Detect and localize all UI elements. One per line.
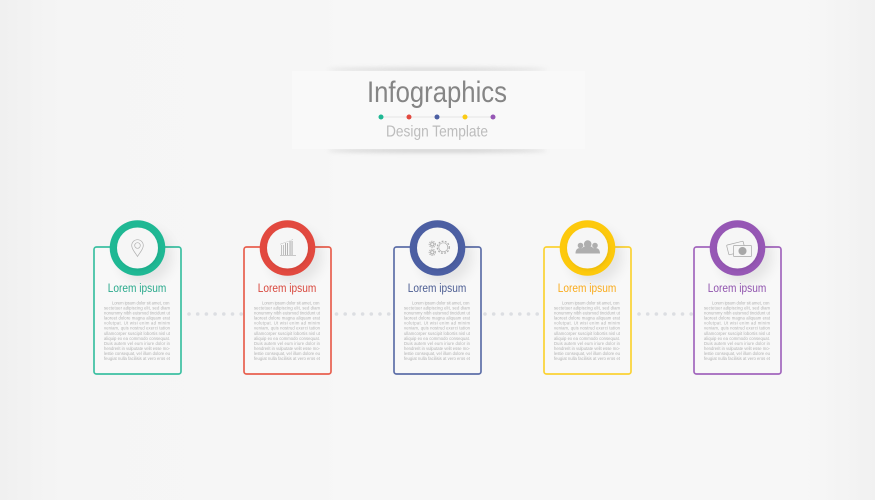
heading: Lorem ipsum: [708, 283, 766, 295]
text block: aliquip ex ea commodo consequat.: [254, 336, 320, 341]
text block: nonummy nibh euismod tincidunt ut: [404, 311, 471, 316]
text block: veniam, quis nostrud exerci tation: [554, 326, 621, 331]
colour dot row: [378, 114, 496, 120]
heading: Lorem ipsum: [108, 283, 166, 295]
text block: hendrerit in vulputate velit esse mo-: [704, 346, 771, 351]
text block: ullamcorper suscipit lobortis nisl ut: [704, 331, 771, 336]
text block: veniam, quis nostrud exerci tation: [104, 326, 171, 331]
text block: volutpat. Ut wisi enim ad minim: [254, 321, 320, 326]
text block: lestie consequat, vel illum dolore eu: [104, 351, 171, 356]
text block: Lorem ipsum dolor sit amet, con: [112, 300, 170, 306]
text block: lestie consequat, vel illum dolore eu: [704, 351, 771, 356]
text block: nonummy nibh euismod tincidunt ut: [104, 311, 171, 316]
text block: veniam, quis nostrud exerci tation: [404, 326, 471, 331]
text block: ullamcorper suscipit lobortis nisl ut: [254, 331, 321, 336]
text block: ullamcorper suscipit lobortis nisl ut: [104, 331, 171, 336]
text block: nonummy nibh euismod tincidunt ut: [554, 311, 621, 316]
text block: volutpat. Ut wisi enim ad minim: [104, 321, 170, 326]
text block: aliquip ex ea commodo consequat.: [704, 336, 770, 341]
text block: Duis autem vel eum iriure dolor in: [404, 341, 471, 346]
text block: laoreet dolore magna aliquam erat: [254, 316, 321, 321]
text block: volutpat. Ut wisi enim ad minim: [704, 321, 770, 326]
panel: card 3 (blue): [394, 220, 481, 374]
text block: feugiat nulla facilisis at vero eros et: [104, 356, 171, 361]
text block: aliquip ex ea commodo consequat.: [104, 336, 170, 341]
text block: hendrerit in vulputate velit esse mo-: [404, 346, 471, 351]
text block: Lorem ipsum dolor sit amet, con: [712, 300, 770, 306]
panel: title banner: [292, 68, 585, 152]
heading: Lorem ipsum: [558, 283, 616, 295]
text block: sectetuer adipiscing elit, sed diam: [404, 306, 470, 310]
text block: hendrerit in vulputate velit esse mo-: [104, 346, 171, 351]
text block: aliquip ex ea commodo consequat.: [554, 336, 620, 341]
text block: hendrerit in vulputate velit esse mo-: [554, 346, 621, 351]
text block: sectetuer adipiscing elit, sed diam: [704, 306, 770, 310]
text block: veniam, quis nostrud exerci tation: [704, 326, 771, 331]
icon: bar chart: [280, 239, 296, 256]
text block: laoreet dolore magna aliquam erat: [104, 316, 171, 321]
text block: Duis autem vel eum iriure dolor in: [704, 341, 771, 346]
text block: [104, 300, 171, 361]
text block: feugiat nulla facilisis at vero eros et: [704, 356, 771, 361]
text block: [254, 300, 321, 361]
title: Infographics: [367, 76, 507, 109]
text block: [554, 300, 621, 361]
text block: feugiat nulla facilisis at vero eros et: [254, 356, 321, 361]
panel: card 1 (green): [94, 220, 181, 374]
text block: ullamcorper suscipit lobortis nisl ut: [404, 331, 471, 336]
panel: card 5 (purple): [694, 220, 781, 374]
heading: Lorem ipsum: [408, 283, 466, 295]
text block: Lorem ipsum dolor sit amet, con: [412, 300, 470, 306]
text block: sectetuer adipiscing elit, sed diam: [554, 306, 620, 310]
panel: card 2 (red): [244, 220, 331, 374]
text block: feugiat nulla facilisis at vero eros et: [554, 356, 621, 361]
text block: [404, 300, 471, 361]
dotted connectors: [187, 312, 693, 316]
text block: Duis autem vel eum iriure dolor in: [554, 341, 621, 346]
icon: gears: [429, 241, 449, 255]
text block: volutpat. Ut wisi enim ad minim: [554, 321, 620, 326]
panel: card 4 (yellow): [544, 220, 631, 374]
text block: laoreet dolore magna aliquam erat: [404, 316, 471, 321]
text block: laoreet dolore magna aliquam erat: [554, 316, 621, 321]
text block: [704, 300, 771, 361]
text block: laoreet dolore magna aliquam erat: [704, 316, 771, 321]
icon: people: [576, 240, 600, 254]
text block: sectetuer adipiscing elit, sed diam: [104, 306, 170, 310]
text block: volutpat. Ut wisi enim ad minim: [404, 321, 470, 326]
text block: nonummy nibh euismod tincidunt ut: [704, 311, 771, 316]
text block: Duis autem vel eum iriure dolor in: [104, 341, 171, 346]
text block: Lorem ipsum dolor sit amet, con: [262, 300, 320, 306]
text block: lestie consequat, vel illum dolore eu: [254, 351, 321, 356]
text block: hendrerit in vulputate velit esse mo-: [254, 346, 321, 351]
heading: Lorem ipsum: [258, 283, 316, 295]
icon: map pin: [132, 240, 143, 256]
icon: banknotes: [727, 241, 752, 256]
text block: aliquip ex ea commodo consequat.: [404, 336, 470, 341]
text block: Duis autem vel eum iriure dolor in: [254, 341, 321, 346]
subtitle: Design Template: [386, 124, 488, 140]
text block: lestie consequat, vel illum dolore eu: [404, 351, 471, 356]
text block: veniam, quis nostrud exerci tation: [254, 326, 321, 331]
text block: lestie consequat, vel illum dolore eu: [554, 351, 621, 356]
text block: feugiat nulla facilisis at vero eros et: [404, 356, 471, 361]
text block: sectetuer adipiscing elit, sed diam: [254, 306, 320, 310]
text block: nonummy nibh euismod tincidunt ut: [254, 311, 321, 316]
text block: ullamcorper suscipit lobortis nisl ut: [554, 331, 621, 336]
text block: Lorem ipsum dolor sit amet, con: [562, 300, 620, 306]
